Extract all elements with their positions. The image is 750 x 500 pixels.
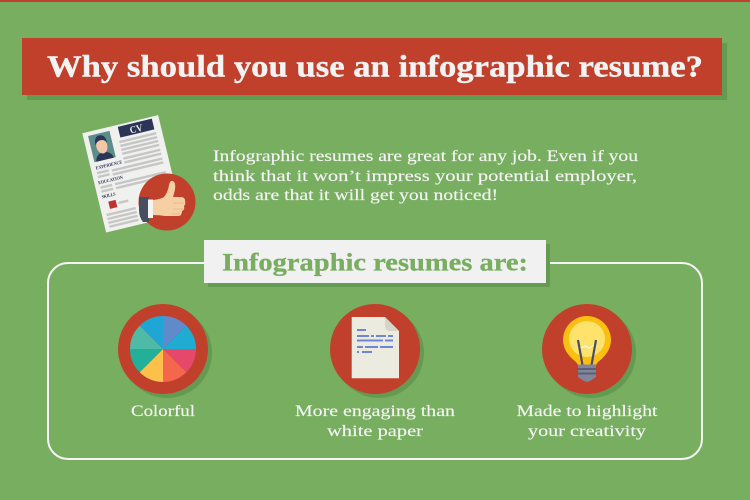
panel heading — [204, 240, 550, 287]
intro paragraph: think that it won’t impress your potential employer, — [213, 168, 637, 185]
icon: light bulb — [542, 304, 636, 398]
red circle with thumb — [138, 174, 196, 230]
panel heading: Infographic resumes are: — [222, 250, 528, 276]
label — [295, 403, 455, 440]
intro paragraph — [213, 148, 638, 204]
icon: CV resume with thumbs up — [82, 115, 196, 232]
label: Colorful — [131, 403, 196, 420]
resume sheet: CV — [129, 123, 145, 136]
label: More engaging than — [295, 403, 455, 420]
label: white paper — [327, 423, 424, 440]
item: creativity — [516, 304, 658, 440]
title banner — [22, 38, 727, 100]
resume sheet: SKILLS — [101, 191, 116, 199]
label: your creativity — [528, 423, 646, 440]
title: Why should you use an infographic resume? — [47, 48, 703, 84]
resume sheet: EXPERIENCE — [95, 159, 123, 171]
label: Made to highlight — [516, 403, 658, 420]
label — [516, 403, 658, 440]
icon: document — [330, 304, 424, 398]
icon: color wheel — [118, 304, 212, 398]
resume sheet: EDUCATION — [98, 175, 124, 185]
rounded panel outline — [48, 263, 702, 459]
intro paragraph: odds are that it will get you noticed! — [213, 187, 498, 204]
resume sheet — [82, 115, 182, 232]
intro paragraph: Infographic resumes are great for any job. Even if you — [213, 148, 638, 165]
item: more engaging — [295, 304, 455, 440]
item: colorful — [118, 304, 212, 420]
